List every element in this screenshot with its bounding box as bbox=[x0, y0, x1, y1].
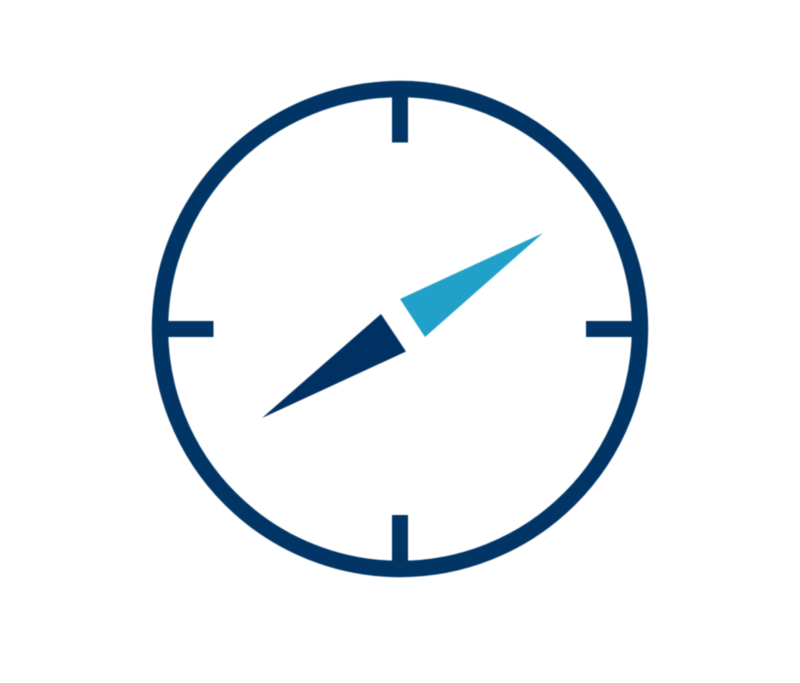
compass needle: light blue north tip bbox=[400, 233, 543, 337]
tick marks bbox=[160, 90, 640, 568]
compass outer ring bbox=[160, 89, 640, 569]
compass needle: dark blue south tip bbox=[262, 314, 406, 418]
